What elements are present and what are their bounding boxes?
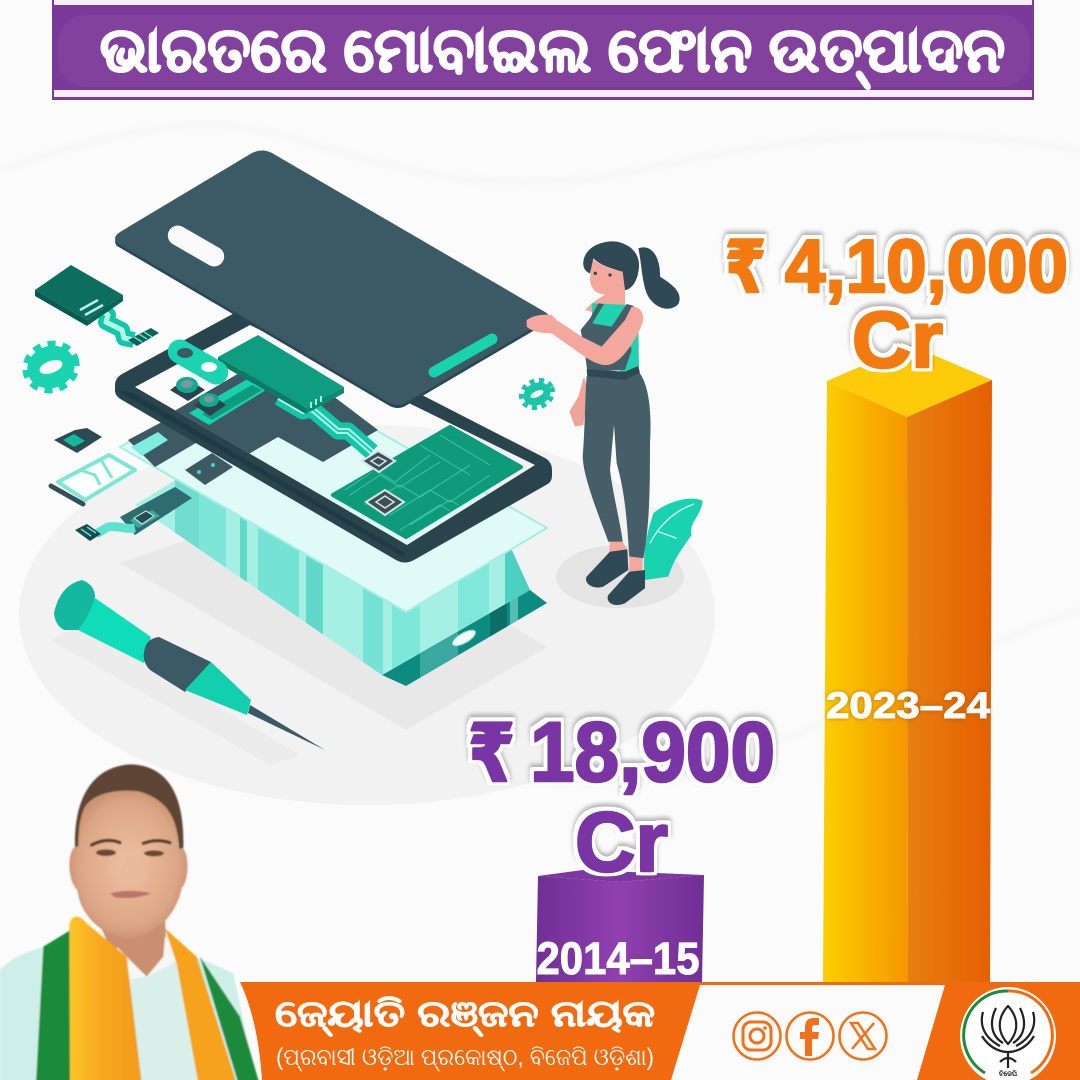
neck <box>97 917 167 977</box>
collar <box>117 937 179 980</box>
leaf <box>644 499 703 580</box>
value: 4,10,000 Cr <box>725 224 1068 384</box>
small mint board <box>131 432 168 456</box>
ponytail <box>638 247 680 309</box>
left scarf orange <box>69 917 142 1080</box>
circuit board <box>333 427 521 537</box>
waist band <box>587 366 640 381</box>
phone frame <box>115 308 552 562</box>
year label: 2014–15 <box>536 933 700 984</box>
reaching arm <box>527 307 643 365</box>
glass layer <box>120 365 547 612</box>
gear icon large <box>19 336 83 398</box>
memory card <box>54 428 102 453</box>
top <box>592 303 639 373</box>
back cover panel <box>115 150 549 408</box>
year label: 2023–24 <box>826 685 990 726</box>
hair <box>583 241 639 290</box>
brows <box>92 840 170 845</box>
phone base plate <box>382 590 547 690</box>
camera slot <box>164 222 228 270</box>
top-left module with flex cable <box>35 265 159 346</box>
value: 4,10,000 Cr: 4,10,000 <box>785 224 1068 308</box>
ankles <box>609 542 643 572</box>
left scarf green <box>36 930 72 1080</box>
exploded phone illustration <box>75 150 552 690</box>
neck <box>585 287 625 317</box>
shirt <box>0 940 257 1080</box>
SIM tray <box>51 455 135 504</box>
icon: instagram <box>734 1012 780 1060</box>
left flex connector <box>75 487 192 541</box>
title banner <box>52 0 1034 100</box>
BJP lotus logo <box>960 987 1056 1080</box>
footer band <box>240 982 1080 1080</box>
value: 4,10,000 Cr: ₹ <box>725 228 766 308</box>
hair <box>75 764 183 848</box>
bar: 2014-15 <box>536 870 704 984</box>
value: 4,10,000 Cr: Cr <box>852 295 943 384</box>
bar: 2023-24 <box>823 345 992 982</box>
translucent screen block <box>135 480 530 675</box>
value: 18,900 Cr: ₹ <box>468 709 515 798</box>
gear icon small <box>517 375 557 413</box>
head <box>69 791 188 938</box>
value: 18,900 Cr: 18,900 <box>530 705 775 799</box>
floor ellipse <box>19 425 715 805</box>
flex ribbon <box>279 397 372 452</box>
role: (ପ୍ରବାସୀ ଓଡ଼ିଆ ପ୍ରକୋଷ୍ଠ, ବିଜେପି ଓଡ଼ିଶା) <box>276 1044 654 1072</box>
icon: facebook <box>786 1012 834 1060</box>
value: 18,900 Cr: Cr <box>575 795 668 889</box>
white social panel <box>671 985 945 1080</box>
floor shadow under feet <box>556 545 684 608</box>
BJP lotus logo: ବିଜେପି <box>999 1070 1018 1078</box>
overall bib <box>581 303 634 372</box>
mouth <box>110 891 152 898</box>
camera lenses <box>170 377 226 416</box>
far hand <box>569 377 588 427</box>
trousers <box>583 373 651 558</box>
screwdriver <box>54 580 325 750</box>
camera bracket <box>163 335 233 389</box>
shoes <box>586 549 628 588</box>
internal dark plate <box>176 371 378 462</box>
portrait <box>0 764 259 1080</box>
phone floor shadow <box>120 500 547 730</box>
plates under glass edge <box>128 415 233 485</box>
camera board <box>189 377 271 425</box>
face <box>590 258 625 294</box>
green status bar <box>434 339 492 372</box>
value: 18,900 Cr <box>468 705 775 889</box>
icon: X <box>840 1012 886 1060</box>
battery <box>218 335 344 414</box>
nose <box>118 857 147 882</box>
title text: ଭାରତରେ ମୋବାଇଲ ଫୋନ ଉତ୍ପାଦନ <box>100 16 1005 89</box>
right scarf <box>165 928 237 1080</box>
name: ଜ୍ୟୋତି ରଞ୍ଜନ ନାୟକ <box>275 993 655 1037</box>
eyes <box>96 849 164 856</box>
placket <box>128 957 200 1080</box>
screwdriver shadow <box>50 625 300 765</box>
woman figure <box>527 241 703 608</box>
